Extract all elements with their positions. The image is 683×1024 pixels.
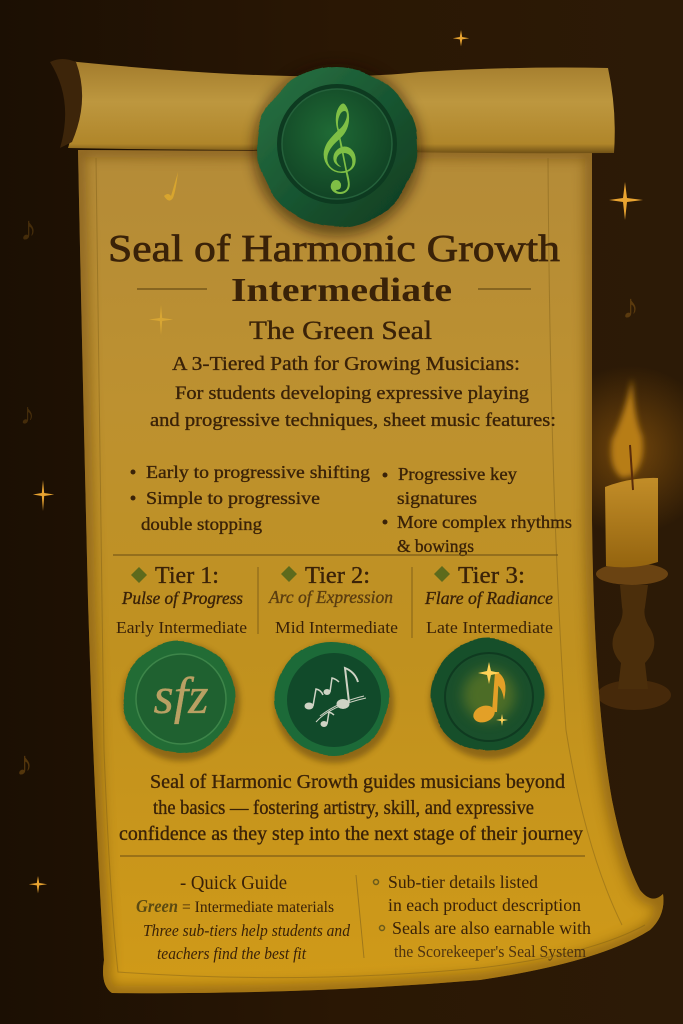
text block: quick guide: Green bbox=[136, 896, 178, 916]
icon: music notes seal bbox=[274, 641, 394, 763]
heading: the green seal: The Green Seal bbox=[249, 316, 432, 345]
icon: candle bbox=[596, 378, 671, 710]
text block: description: confidence as they step into the next stage of their journey bbox=[119, 823, 584, 845]
icon: glowing note seal bbox=[430, 639, 548, 759]
list: right features: & bowings bbox=[397, 536, 474, 556]
sparkles and background music notes: ♪ bbox=[16, 746, 33, 783]
text block: intro: For students developing expressive playing bbox=[175, 384, 529, 404]
panel: tier 1 bbox=[116, 563, 247, 761]
panel: tier 3: Flare of Radiance bbox=[424, 588, 553, 608]
panel: tier 2 bbox=[268, 563, 398, 763]
subtitle with side rules: Intermediate bbox=[231, 272, 452, 309]
icon: main green wax seal with treble clef bbox=[253, 64, 421, 236]
text block: description: the basics — fostering artistry, skill, and expressive bbox=[153, 797, 534, 819]
text block: notes bbox=[374, 872, 591, 961]
text block: description: Seal of Harmonic Growth guides musicians beyond bbox=[150, 771, 565, 793]
text block: description bbox=[119, 771, 584, 845]
text block: quick guide: = Intermediate materials bbox=[182, 899, 334, 916]
sparkles and background music notes: ♪ bbox=[622, 289, 639, 326]
heading: path description: A 3-Tiered Path for Growing Musicians: bbox=[172, 353, 520, 375]
yellow note on parchment bbox=[164, 172, 178, 201]
sparkles and background music notes: ♪ bbox=[20, 398, 35, 431]
panel: tier 1: Early Intermediate bbox=[116, 618, 247, 637]
icon: main green wax seal with treble clef: 𝄞 bbox=[315, 101, 359, 194]
icon: sfz seal bbox=[122, 641, 240, 761]
sparkles and background music notes: ♪ bbox=[20, 211, 37, 248]
parchment sheet bbox=[78, 150, 663, 993]
sparkle on parchment bbox=[149, 305, 173, 335]
list: left features: Simple to progressive bbox=[146, 488, 320, 508]
list: left features: double stopping bbox=[141, 514, 262, 534]
text block: quick guide bbox=[136, 872, 350, 963]
text block: notes: Sub-tier details listed bbox=[388, 872, 538, 892]
parchment edge shading bbox=[78, 150, 663, 993]
panel: tier 3: Tier 3: bbox=[458, 563, 525, 589]
panel: tier 1: Pulse of Progress bbox=[121, 588, 243, 608]
top roll bbox=[58, 60, 615, 153]
list: right features: More complex rhythms bbox=[397, 512, 572, 532]
list: right features: signatures bbox=[397, 488, 477, 508]
list: left features bbox=[130, 462, 370, 534]
gold note bbox=[471, 672, 505, 725]
list: right features: Progressive key bbox=[398, 464, 517, 484]
panel: tier 3 bbox=[424, 563, 553, 759]
text block: quick guide: - Quick Guide bbox=[180, 872, 287, 894]
text block: intro bbox=[150, 384, 556, 431]
panel: tier 2: Arc of Expression bbox=[268, 587, 393, 607]
title: Seal of Harmonic Growth bbox=[108, 228, 560, 270]
parchment inner border bbox=[96, 158, 645, 978]
text block: notes: in each product description bbox=[388, 895, 581, 915]
sparkles and background music notes bbox=[16, 30, 643, 893]
list: left features: Early to progressive shifting bbox=[146, 462, 370, 482]
candle glow bbox=[545, 365, 683, 535]
panel: tier 2: Tier 2: bbox=[305, 563, 370, 589]
icon: sfz seal: sfz bbox=[154, 668, 208, 725]
panel: tier 1: Tier 1: bbox=[155, 563, 219, 589]
text block: quick guide: Three sub-tiers help students and bbox=[143, 921, 350, 940]
panel: tier 2: Mid Intermediate bbox=[275, 618, 398, 637]
text block: notes: the Scorekeeper's Seal System bbox=[394, 942, 586, 961]
text block: notes: Seals are also earnable with bbox=[392, 918, 591, 938]
panel: tier 3: Late Intermediate bbox=[426, 618, 553, 637]
list: right features bbox=[382, 464, 572, 556]
text block: quick guide: teachers find the best fit bbox=[157, 944, 307, 963]
silver notes bbox=[304, 668, 366, 727]
roll left end bbox=[50, 59, 82, 148]
text block: intro: and progressive techniques, sheet music features: bbox=[150, 411, 556, 431]
